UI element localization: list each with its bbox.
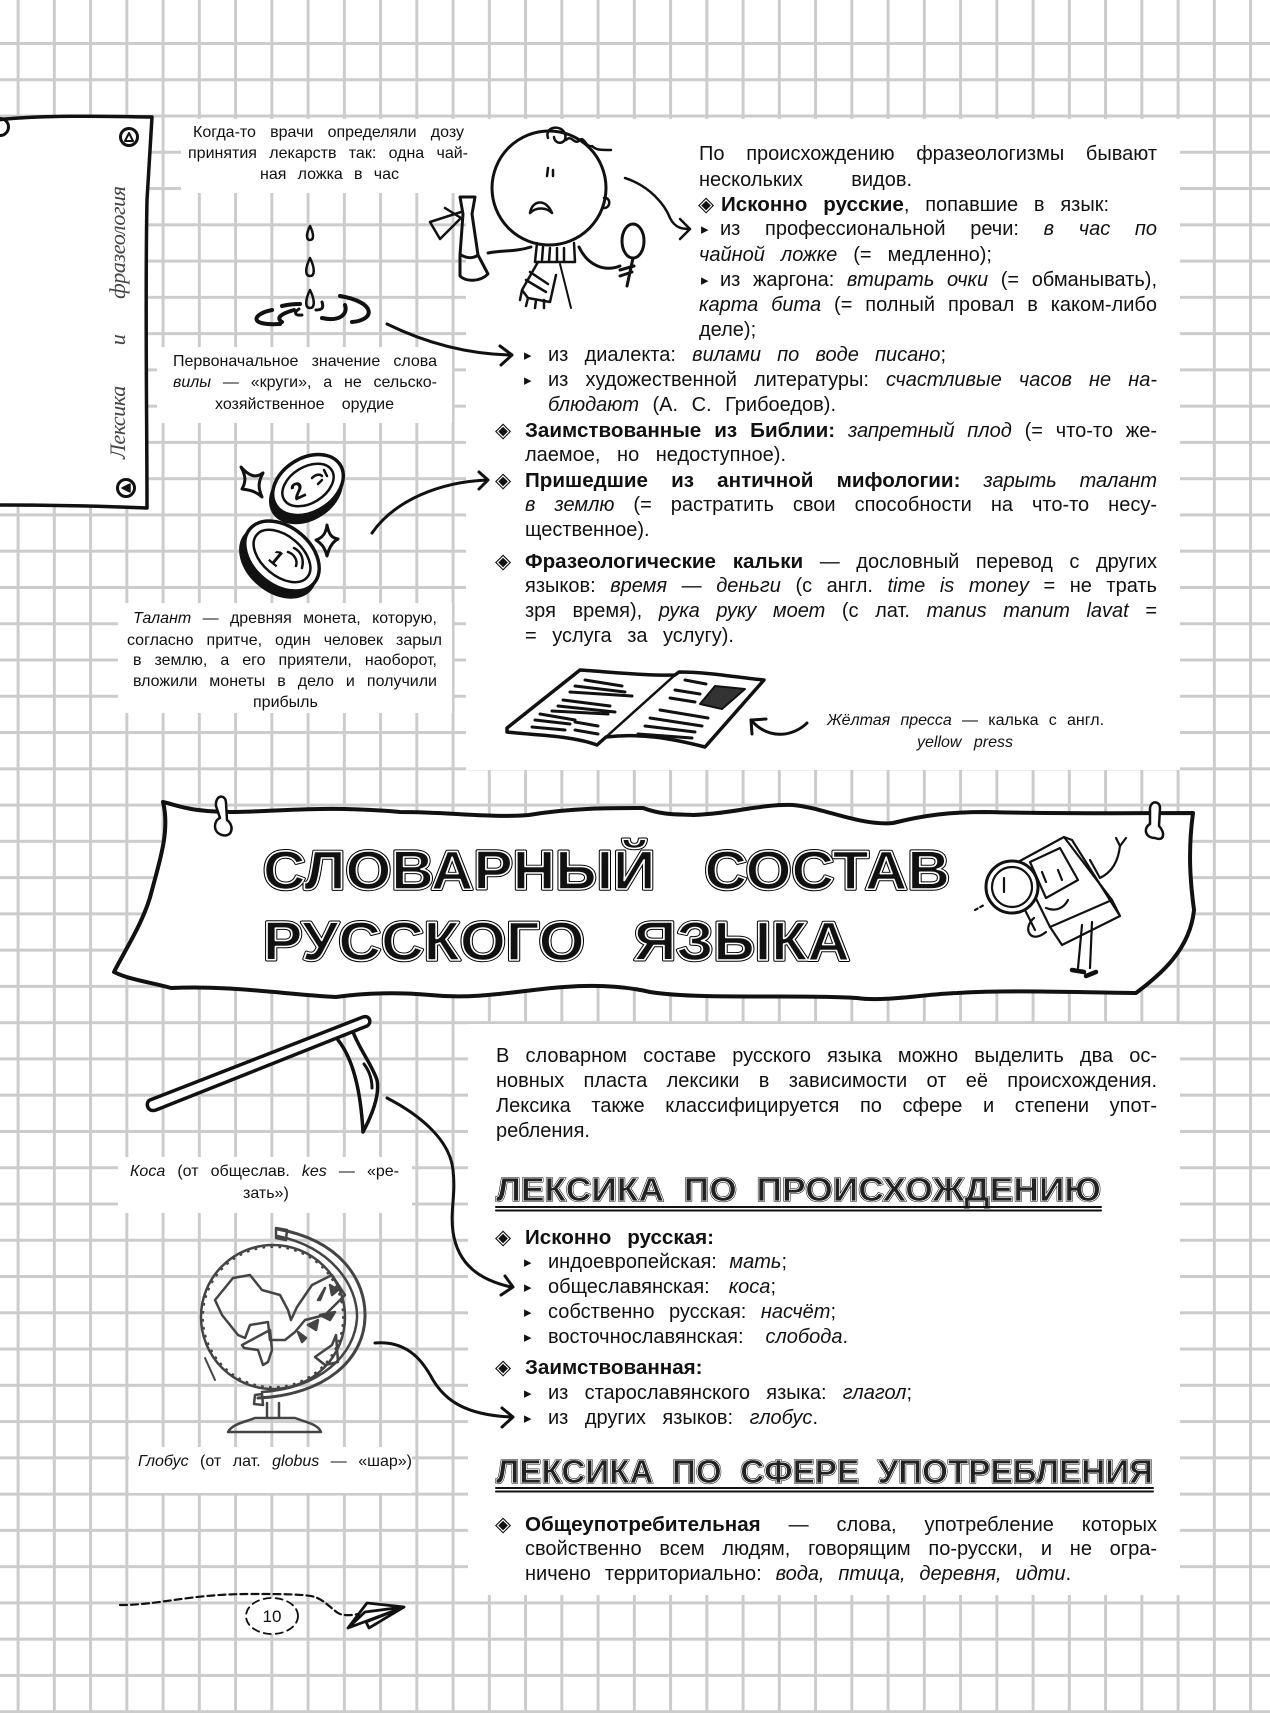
arrow: boy to teaspoon phrase [625, 178, 690, 239]
list: native vocabulary: индоевропейская: мать; [548, 1251, 787, 1273]
text block: dialect, literature, Bible, mythology: Заимствованные из Библии: запретный плод (= что-то же- [525, 419, 1157, 442]
text block: calques [495, 549, 1157, 647]
icon: globe [201, 1228, 365, 1432]
text block: kinds of idioms, native: нескольких видов. [699, 169, 912, 191]
text block: kinds of idioms, native: чайной ложке (= медленно); [699, 244, 992, 266]
subheading: origin of vocabulary: ЛЕКСИКА ПО ПРОИСХОЖДЕНИЮ [496, 1171, 1101, 1208]
text block: common vocabulary: ◈ [495, 1512, 511, 1536]
banner: paper sign [114, 797, 1194, 999]
icon: open newspaper [507, 670, 764, 747]
icon: sick boy with medicine bottle and spoon [430, 128, 644, 308]
arrow: scythe to common Slavic [387, 1098, 513, 1295]
caption: talent [127, 610, 442, 710]
panel: side tab [0, 116, 152, 508]
text block: vocabulary intro: Лексика также классифицируется по сфере и степени упот- [496, 1095, 1157, 1117]
caption: talent: вложили монеты в дело и получили [133, 672, 437, 690]
title: banner heading [263, 838, 950, 972]
text block: kinds of idioms, native: Исконно русские, попавшие в язык: [721, 193, 1109, 216]
caption: pitchfork: хозяйственное орудие [215, 396, 394, 412]
arrow: coins to mythology [372, 472, 488, 533]
list: native vocabulary: общеславянская: коса; [548, 1276, 776, 1298]
text block: kinds of idioms, native: ◈ [698, 192, 714, 216]
list: native vocabulary: Исконно русская: [525, 1226, 714, 1249]
caption: teaspoon: принятия лекарств так: одна чай- [188, 144, 468, 162]
caption: talent: прибыль [253, 694, 318, 710]
text block: kinds of idioms, native: из жаргона: втирать очки (= обманывать), [720, 269, 1157, 291]
title: banner heading: СЛОВАРНЫЙ СОСТАВ [263, 838, 950, 901]
caption: yellow press: yellow press [917, 734, 1013, 750]
list: native vocabulary: ◈ [495, 1225, 511, 1249]
text block: dialect, literature, Bible, mythology: ▸ [524, 346, 532, 364]
text block: common vocabulary: Общеупотребительная — слова, употребление которых [525, 1513, 1157, 1536]
text block: kinds of idioms, native: карта бита (= полный провал в каком-либо [699, 294, 1157, 316]
caption: globe: Глобус (от лат. globus — «шар») [138, 1452, 412, 1470]
arrow: globe to other languages [375, 1343, 513, 1427]
list: borrowed vocabulary: ◈ [495, 1355, 511, 1379]
title: banner heading: СЛОВАРНЫЙ СОСТАВ [263, 838, 950, 901]
list: native vocabulary [495, 1225, 848, 1348]
list: native vocabulary: восточнославянская: слобода. [548, 1326, 848, 1348]
list: borrowed vocabulary: из старославянского языка: глагол; [548, 1382, 912, 1404]
text block: dialect, literature, Bible, mythology: из диалекта: вилами по воде писано; [548, 344, 946, 366]
text block: dialect, literature, Bible, mythology: лаемое, но недоступное). [525, 444, 786, 466]
caption: scythe: зать») [243, 1184, 289, 1202]
text block: kinds of idioms, native [698, 143, 1157, 341]
text block: vocabulary intro: В словарном составе русского языка можно выделить два ос- [496, 1045, 1157, 1067]
caption: scythe: Коса (от общеслав. kes — «ре- [130, 1162, 399, 1180]
icon: right pin [1146, 802, 1163, 839]
list: native vocabulary: ▸ [524, 1328, 532, 1346]
text block: dialect, literature, Bible, mythology: из художественной литературы: счастливые часов не на- [548, 369, 1157, 391]
text block: calques: Фразеологические кальки — дословный перевод с других [525, 550, 1157, 573]
icon: coins and stars: 1 [264, 544, 289, 572]
text block: kinds of idioms, native: ▸ [701, 220, 709, 238]
text block: common vocabulary: ничено территориально: вода, птица, деревня, идти. [525, 1563, 1071, 1585]
text block: dialect, literature, Bible, mythology: блюдают (А. С. Грибоедов). [548, 394, 836, 416]
icon: water drops and circles [256, 226, 369, 324]
list: native vocabulary: ▸ [524, 1278, 532, 1296]
caption: talent: согласно притче, один человек зарыл [127, 632, 442, 648]
subheading: sphere of use: ЛЕКСИКА ПО СФЕРЕ УПОТРЕБЛЕНИЯ [496, 1453, 1153, 1490]
icon: scythe [147, 1017, 378, 1132]
title: banner heading: РУССКОГО ЯЗЫКА [263, 910, 850, 972]
list: borrowed vocabulary: ▸ [524, 1384, 532, 1402]
text block: dialect, literature, Bible, mythology: щественное). [525, 519, 650, 541]
text block: kinds of idioms, native: По происхождению фразеологизмы бывают [699, 143, 1157, 165]
caption: talent: Талант — древняя монета, которую, [133, 610, 437, 626]
list: native vocabulary: ▸ [524, 1303, 532, 1321]
icon: coins and stars: 2 [286, 476, 310, 506]
caption: pitchfork: вилы — «круги», а не сельско- [173, 374, 437, 390]
text block: kinds of idioms, native: ▸ [701, 271, 709, 289]
caption: yellow press: Жёлтая пресса — калька с англ. [827, 712, 1104, 728]
text block: calques: языков: время — деньги (с англ. time is money = не трать [525, 575, 1157, 597]
list: native vocabulary: собственно русская: насчёт; [548, 1301, 836, 1323]
arrow: circles to dialect [387, 324, 512, 365]
arrow: newspaper caption [751, 719, 807, 734]
text block: calques: ◈ [495, 549, 511, 573]
text block: vocabulary intro [496, 1045, 1157, 1142]
caption: teaspoon: Когда-то врачи определяли дозу [193, 124, 464, 140]
text block: kinds of idioms, native: из профессиональной речи: в час по [720, 218, 1157, 240]
icon: left pin [215, 797, 232, 835]
caption: teaspoon: ная ложка в час [260, 166, 399, 182]
caption: talent: в землю, а его приятели, наоборот, [133, 652, 437, 669]
page number with paper plane [120, 1594, 404, 1634]
caption: pitchfork: Первоначальное значение слова [173, 352, 437, 370]
list: borrowed vocabulary [495, 1355, 912, 1429]
text block: dialect, literature, Bible, mythology: ▸ [524, 371, 532, 389]
list: native vocabulary: ▸ [524, 1253, 532, 1271]
page number with paper plane: 10 [263, 1607, 281, 1626]
caption: yellow press [826, 712, 1104, 750]
list: borrowed vocabulary: из других языков: глобус. [548, 1407, 818, 1429]
list: borrowed vocabulary: ▸ [524, 1409, 532, 1427]
caption: teaspoon [188, 124, 468, 182]
icon: coins and stars [227, 442, 355, 611]
subheading: origin of vocabulary: ЛЕКСИКА ПО ПРОИСХОЖДЕНИЮ [496, 1171, 1101, 1208]
title: banner heading: РУССКОГО ЯЗЫКА [263, 910, 850, 972]
text block: calques: зря время), рука руку моет (с лат. manus manum lavat = [525, 600, 1157, 622]
text block: common vocabulary [495, 1512, 1157, 1585]
text block: kinds of idioms, native: деле); [699, 319, 756, 341]
text block: dialect, literature, Bible, mythology [495, 344, 1157, 541]
text block: dialect, literature, Bible, mythology: ◈ [495, 468, 511, 492]
caption: pitchfork [173, 352, 438, 412]
caption: scythe [130, 1162, 399, 1202]
text block: vocabulary intro: ребления. [496, 1120, 590, 1142]
text block: common vocabulary: свойственно всем людям, говорящим по-русски, и не огра- [525, 1538, 1157, 1560]
icon: book character with magnifier [975, 837, 1126, 976]
side tab label: Лексика и фразеология [105, 186, 130, 460]
text block: dialect, literature, Bible, mythology: в землю (= растратить свои способности на что-то несу- [525, 494, 1157, 516]
subheading: sphere of use: ЛЕКСИКА ПО СФЕРЕ УПОТРЕБЛЕНИЯ [496, 1453, 1153, 1490]
text block: calques: = услуга за услугу). [525, 625, 734, 647]
list: borrowed vocabulary: Заимствованная: [525, 1356, 703, 1379]
text block: vocabulary intro: новных пласта лексики в зависимости от её происхождения. [496, 1070, 1157, 1092]
text block: dialect, literature, Bible, mythology: ◈ [495, 418, 511, 442]
text block: dialect, literature, Bible, mythology: Пришедшие из античной мифологии: зарыть талант [525, 469, 1157, 492]
